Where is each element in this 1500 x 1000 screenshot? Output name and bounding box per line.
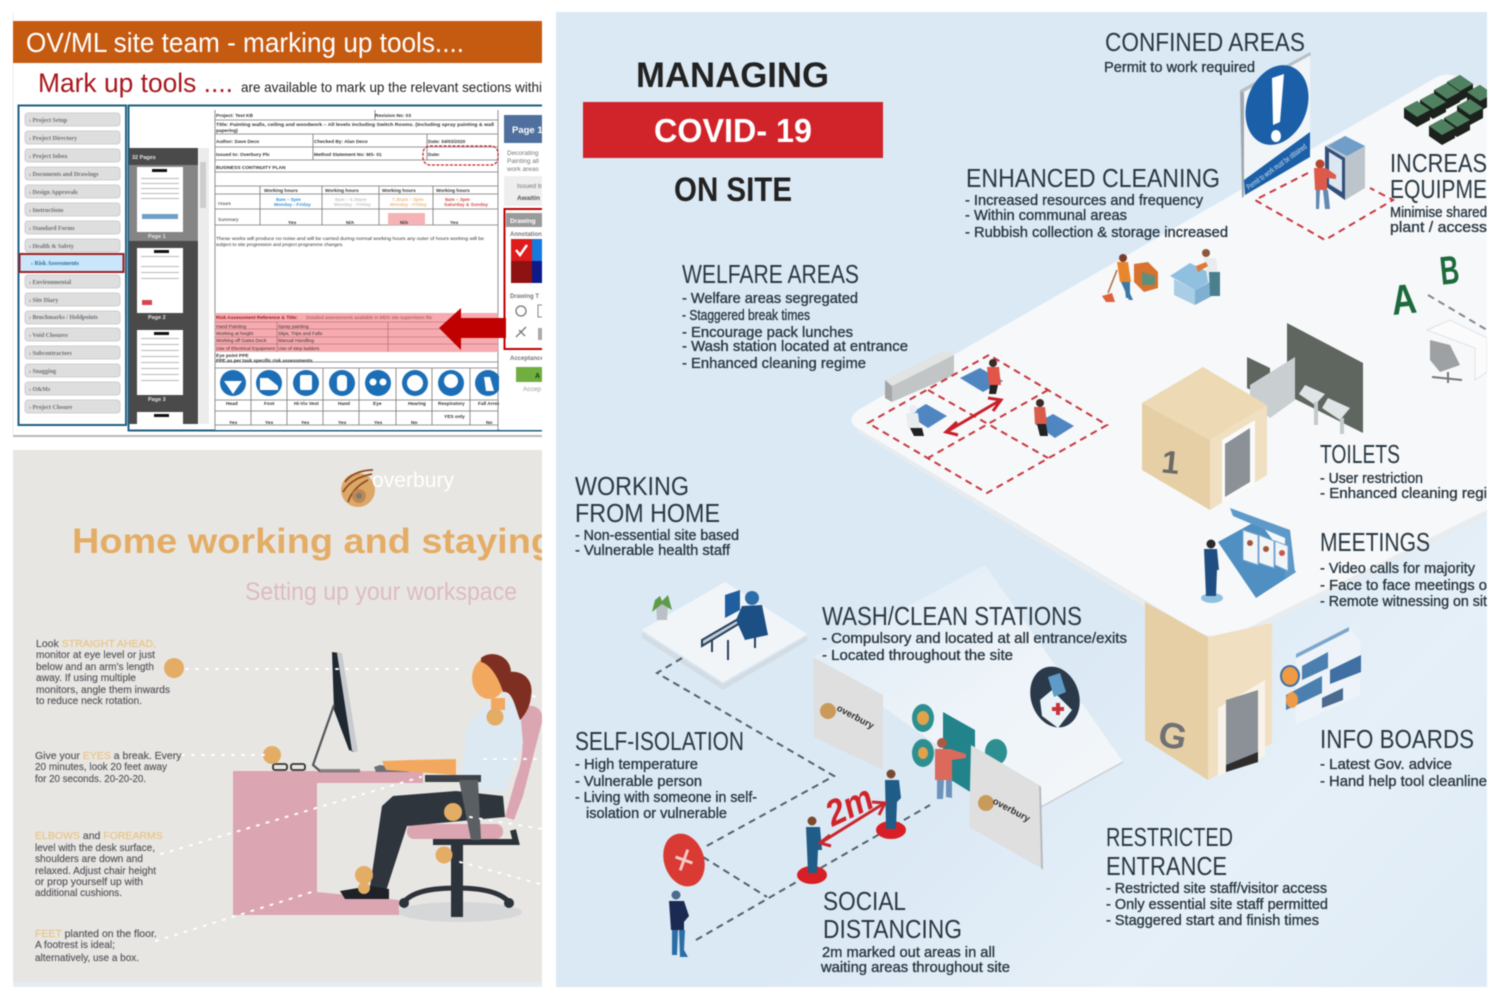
- text block: wash clean stations: [822, 603, 1127, 664]
- text block: welfare areas: WELFARE AREAS: [682, 261, 859, 289]
- sidebar menu: › Benchmarks / Holdpoints: [29, 315, 99, 321]
- document page: Working hours: [325, 188, 359, 194]
- sidebar menu: › Instructions: [29, 208, 64, 214]
- text block: welfare areas: - Wash station located at entrance: [682, 339, 908, 355]
- isolation dashed routes: [657, 658, 930, 940]
- text block: eyes: Give your EYES a break. Every: [35, 750, 182, 762]
- document page: Date: 04/03/2020: [428, 139, 466, 145]
- document page: N/A: [400, 220, 409, 226]
- highlighted date box: [423, 146, 498, 165]
- icon: floor marks A and B: B: [1438, 248, 1461, 294]
- document page: N/A: [346, 220, 355, 226]
- sidebar menu: › Project Setup: [29, 118, 68, 124]
- properties side panel: Acceptance: [510, 356, 544, 362]
- text block: toilets: - User restriction: [1320, 471, 1423, 487]
- text block: working from home: - Non-essential site based: [575, 528, 739, 544]
- title: COVID- 19: [654, 112, 812, 149]
- text block: meetings: - Face to face meetings o: [1320, 578, 1487, 594]
- properties side panel: Painting all: [507, 158, 539, 165]
- text block: confined areas: CONFINED AREAS: [1105, 29, 1305, 57]
- document page: Hi-Vis Vest: [294, 401, 319, 407]
- document page: Working hours: [264, 188, 298, 194]
- confined area dashed zone: [1255, 173, 1393, 240]
- text block: feet: alternatively, use a box.: [35, 952, 139, 964]
- text block: elbows: relaxed. Adjust chair height: [35, 865, 156, 877]
- sidebar menu: › Project Closure: [29, 405, 73, 411]
- sidebar menu: › Health & Safety: [29, 244, 74, 250]
- document page: 9am – 3pm: [445, 197, 470, 203]
- document page: Eye: [373, 401, 382, 407]
- text block: feet: [35, 928, 157, 964]
- text block: toilets: - Enhanced cleaning regi: [1320, 486, 1487, 502]
- icon: office desk and chair: [1427, 295, 1487, 383]
- page thumbnails: Page 1: [148, 234, 166, 240]
- text block: meetings: - Remote witnessing on sit: [1320, 594, 1487, 610]
- document page: Date:: [428, 152, 440, 158]
- icon: cleaners: [1102, 249, 1220, 305]
- title: ON SITE: [674, 171, 792, 209]
- text block: straight ahead: below and an arm's length: [36, 661, 154, 673]
- desk: [233, 771, 423, 915]
- text block: elbows: or prop yourself up with: [35, 876, 143, 888]
- properties side panel: A: [535, 373, 540, 380]
- text block: social distancing: DISTANCING: [823, 916, 962, 944]
- document page: No: [486, 420, 492, 426]
- text block: self isolation: isolation or vulnerable: [586, 806, 727, 822]
- document page: Issued to: Overbury Plc: [216, 152, 270, 158]
- document page: 7.30am – 5pm: [392, 197, 423, 203]
- text block: elbows: [35, 830, 163, 899]
- icon: worker at cabinet: [1314, 136, 1365, 209]
- slide title bar: [13, 21, 542, 63]
- text block: increased equipment: [1390, 150, 1487, 236]
- properties side panel: Page 1: [512, 125, 543, 136]
- icon: overbury logo: overbury: [372, 469, 455, 492]
- title: [583, 56, 883, 209]
- document page: Eye point PPE: [216, 353, 249, 359]
- properties side panel: work areas: [506, 166, 540, 173]
- text block: elbows: level with the desk surface,: [35, 842, 155, 854]
- callout markers: [164, 658, 504, 894]
- chair: [399, 706, 542, 917]
- document page: [215, 109, 502, 430]
- icon: overbury logo: [341, 469, 455, 507]
- icon: ground core box with door: [1145, 602, 1272, 780]
- text block: increased equipment: Minimise shared: [1390, 205, 1487, 221]
- text block: eyes: [35, 750, 182, 785]
- document page: Respiratory: [438, 401, 465, 407]
- text block: info boards: [1320, 726, 1487, 790]
- document page: These works will produce no noise and will be carried during normal working hours any outer of hours working will be: [216, 236, 484, 242]
- document page: Monday - Friday: [334, 202, 371, 208]
- icon: worker at door: [935, 738, 966, 799]
- text block: restricted entrance: ENTRANCE: [1106, 853, 1227, 881]
- properties side panel: Accep: [523, 386, 541, 393]
- icon: floor marks A and B: [1389, 248, 1461, 324]
- sidebar menu: › Design Approvals: [29, 190, 78, 196]
- icon: info boards: [1281, 627, 1361, 725]
- arrow: two metres apart: [820, 802, 885, 846]
- text block: working from home: FROM HOME: [575, 500, 720, 528]
- text block: restricted entrance: - Staggered start and finish times: [1106, 913, 1319, 929]
- icon: video meeting: [1201, 508, 1296, 603]
- document page: Yes: [338, 420, 347, 426]
- welfare dashed grid: [868, 355, 1107, 493]
- properties side panel: Annotation: [510, 232, 542, 238]
- document page: Manual Handling: [278, 338, 314, 344]
- document page: Summary: [218, 217, 239, 223]
- document page: Hand Painting: [216, 324, 246, 330]
- text block: restricted entrance: - Restricted site staff/visitor access: [1106, 881, 1327, 897]
- document page: subject to site progression and project programme changes.: [216, 242, 343, 248]
- PPE icons: [220, 370, 501, 396]
- icon: toilet partitions and sinks: [1247, 323, 1363, 434]
- sidebar menu: › Subcontractors: [29, 351, 72, 357]
- icon: welfare tables: [906, 359, 1074, 438]
- worker: [340, 654, 532, 899]
- icon: overbury hoarding panel right: overbury: [991, 796, 1032, 825]
- text block: enhanced cleaning: - Increased resources and frequency: [965, 193, 1204, 209]
- text block: working from home: WORKING: [575, 473, 689, 501]
- page thumbnails: Page 3: [148, 397, 166, 403]
- text block: toilets: [1320, 441, 1487, 502]
- text block: confined areas: Permit to work required: [1104, 60, 1255, 76]
- document page: Working hours: [436, 188, 470, 194]
- text block: increased equipment: INCREAS: [1390, 150, 1487, 178]
- icon: hand sanitiser badge: [1023, 660, 1087, 734]
- document page: Monday - Friday: [274, 202, 311, 208]
- slide subtitle: [39, 72, 542, 98]
- properties side panel: Awaitin: [517, 195, 540, 202]
- subheading: Setting up your workspace: [245, 578, 517, 606]
- document page: Foot: [264, 401, 275, 407]
- text block: restricted entrance: RESTRICTED: [1106, 824, 1233, 852]
- document page: Hours: [218, 201, 231, 207]
- document page: Checked By: Alan Deco: [314, 139, 368, 145]
- sidebar menu: [18, 106, 126, 425]
- title: MANAGING: [636, 56, 829, 95]
- text block: meetings: - Video calls for majority: [1320, 561, 1476, 577]
- text block: elbows: ELBOWS and FOREARMS: [35, 830, 163, 842]
- text block: info boards: - Hand help tool cleanline: [1320, 774, 1487, 790]
- document page: Yes: [374, 420, 383, 426]
- text block: wash clean stations: - Located throughout the site: [822, 648, 1013, 664]
- monitor: [313, 652, 360, 772]
- panel: marking up tools slide: [12, 12, 550, 438]
- icon: kitchen counter: [885, 350, 954, 402]
- text block: welfare areas: - Enhanced cleaning regime: [682, 356, 866, 372]
- icon: upper core box with door: [1142, 367, 1267, 510]
- sidebar menu: › Standard Forms: [29, 226, 75, 232]
- document page: Working at height: [216, 331, 254, 337]
- text block: welfare areas: [682, 261, 908, 372]
- document page: Hand: [338, 401, 350, 407]
- text block: feet: A footrest is ideal;: [35, 939, 115, 951]
- text block: increased equipment: plant / access: [1390, 220, 1487, 236]
- icon: home desk platform: [642, 582, 807, 690]
- icon: overbury hoarding panel left: overbury: [835, 703, 876, 732]
- document page: Spray painting: [278, 324, 309, 330]
- text block: social distancing: waiting areas throughout site: [820, 960, 1010, 976]
- ground floor platform: [813, 565, 1123, 807]
- text block: wash clean stations: WASH/CLEAN STATIONS: [822, 603, 1082, 631]
- page thumbnails: 32 Pages: [132, 155, 156, 161]
- text block: toilets: TOILETS: [1320, 441, 1400, 469]
- text block: straight ahead: monitors, angle them inwards: [36, 684, 170, 696]
- document page: Title: Painting walls, ceiling and woodwork – All levels including Switch Rooms. (Including spray painting & wall: [216, 122, 494, 128]
- text block: self isolation: - Vulnerable person: [575, 774, 702, 790]
- text block: eyes: for 20 seconds. 20-20-20.: [35, 773, 146, 785]
- document page: Slips, Trips and Falls: [278, 331, 323, 337]
- icon: ground core box with door: G: [1155, 713, 1191, 759]
- text block: self isolation: SELF-ISOLATION: [575, 728, 744, 756]
- document page: papering): [216, 128, 238, 134]
- document page: Head: [226, 401, 238, 407]
- document page: Saturday & Sunday: [444, 202, 488, 208]
- document page: PPE as per task specific risk assessments: [216, 358, 313, 364]
- sidebar menu: › O&Ms: [29, 387, 51, 393]
- sidebar menu: › Void Closures: [29, 333, 69, 339]
- two metre label: 2m: [818, 777, 879, 834]
- sidebar menu: › Risk Assessments: [31, 261, 80, 267]
- text block: elbows: shoulders are down and: [35, 853, 143, 865]
- document page: Method Statement No: MS- 01: [314, 152, 382, 158]
- document page: Hearing: [408, 401, 426, 407]
- icon: upper core box with door: 1: [1160, 443, 1181, 481]
- sidebar menu: › Project Directory: [29, 136, 77, 142]
- icon: overbury hoarding panel left: [813, 657, 883, 770]
- panel: managing covid-19 on site: [556, 12, 1493, 987]
- text block: elbows: additional cushions.: [35, 887, 122, 899]
- text block: straight ahead: [36, 638, 170, 707]
- text block: welfare areas: - Staggered break times: [682, 308, 810, 324]
- properties side panel: [498, 114, 543, 431]
- arrow: two metre separation: [946, 398, 1001, 435]
- document page: Use of Electrical Equipment: [216, 346, 276, 352]
- text block: restricted entrance: - Only essential site staff permitted: [1106, 897, 1328, 913]
- text block: welfare areas: - Welfare areas segregated: [682, 291, 858, 307]
- sidebar menu: › Documents and Drawings: [29, 172, 99, 178]
- icon: mandatory permit sign: [1240, 52, 1312, 198]
- sidebar menu: › Snagging: [29, 369, 56, 375]
- glasses: [273, 764, 305, 770]
- icon: equipment cluster: [1404, 75, 1493, 145]
- text block: working from home: [575, 473, 739, 559]
- page thumbnails: Page 2: [148, 315, 166, 321]
- text block: meetings: [1320, 529, 1487, 610]
- text block: enhanced cleaning: - Within communal areas: [965, 208, 1127, 224]
- text block: social distancing: 2m marked out areas in all: [822, 945, 995, 961]
- page thumbnails: [129, 148, 209, 426]
- document page: 8am – 5pm: [276, 197, 301, 203]
- keyboard: [374, 765, 409, 772]
- text block: enhanced cleaning: ENHANCED CLEANING: [966, 165, 1220, 193]
- text block: eyes: 20 minutes, look 20 feet away: [35, 761, 168, 773]
- document page: Use of step ladders: [278, 346, 320, 352]
- slide subtitle: are available to mark up the relevant sections withi: [241, 79, 542, 95]
- document page: Project: Test KB: [216, 113, 253, 119]
- text block: straight ahead: Look STRAIGHT AHEAD,: [36, 638, 156, 650]
- properties side panel: Issued b: [517, 183, 542, 190]
- text block: self isolation: - Living with someone in self-: [575, 790, 757, 806]
- panel: home working slide: [13, 450, 554, 987]
- document page: Yes: [288, 220, 297, 226]
- document page: Revision No: 03: [375, 113, 411, 119]
- document page: 8am – 5.30pm: [335, 197, 366, 203]
- text block: social distancing: [820, 888, 1010, 976]
- document page: Risk Assessment Reference & Title:: [216, 315, 298, 321]
- text block: welfare areas: - Encourage pack lunches: [682, 325, 853, 341]
- document page: Fall Arrest: [478, 401, 502, 407]
- text block: self isolation: - High temperature: [575, 757, 698, 773]
- document page: BUSINESS CONTINUITY PLAN: [216, 165, 286, 171]
- slide title bar: OV/ML site team - marking up tools....: [26, 27, 464, 58]
- text block: straight ahead: to reduce neck rotation.: [36, 695, 142, 707]
- text block: self isolation: [575, 728, 757, 822]
- main viewer frame: [128, 106, 548, 430]
- text block: meetings: MEETINGS: [1320, 529, 1430, 557]
- text block: info boards: INFO BOARDS: [1320, 726, 1474, 754]
- heading: Home working and staying: [72, 522, 554, 561]
- arrow: red pointer to risk table: [439, 308, 506, 350]
- document page: Author: Dave Deco: [216, 139, 259, 145]
- text block: restricted entrance: [1106, 824, 1328, 929]
- document page: Detailed assessments available in MDS site supervision file: [306, 315, 432, 321]
- text block: feet: FEET planted on the floor.: [35, 928, 157, 940]
- text block: enhanced cleaning: [965, 165, 1228, 241]
- sidebar menu: › Project Inbox: [29, 154, 68, 160]
- sidebar menu: › Environmental: [29, 280, 71, 286]
- text block: wash clean stations: - Compulsory and located at all entrance/exits: [822, 631, 1127, 647]
- icon: floor marks A and B: A: [1389, 275, 1419, 324]
- document page: Monday - Friday: [390, 202, 427, 208]
- social distancing figures: [797, 770, 906, 884]
- icon: overbury hoarding panel right: [969, 745, 1043, 870]
- icon: mandatory permit sign: Permit to work must be obtained: [1245, 142, 1308, 192]
- left person on marker: [797, 816, 827, 884]
- properties side panel: Decorating: [507, 150, 539, 157]
- text block: social distancing: SOCIAL: [823, 888, 906, 916]
- document page: Working off Gates Deck: [216, 338, 267, 344]
- right person on marker: [876, 770, 906, 839]
- properties side panel: Drawing: [510, 218, 536, 225]
- text block: working from home: - Vulnerable health staff: [575, 543, 731, 559]
- document page: Yes: [265, 420, 274, 426]
- illustration: desk and seated worker: [156, 652, 542, 941]
- properties side panel: Drawing T: [510, 294, 539, 300]
- text block: info boards: - Latest Gov. advice: [1320, 757, 1452, 773]
- document page: Yes: [301, 420, 310, 426]
- text block: confined areas: [1104, 29, 1305, 76]
- sidebar menu: › Site Diary: [29, 298, 58, 304]
- text block: straight ahead: away. If using multiple: [36, 672, 136, 684]
- document page: No: [411, 420, 417, 426]
- document page: YES only: [444, 414, 465, 420]
- text block: straight ahead: monitor at eye level or just: [36, 649, 155, 661]
- document page: Yes: [229, 420, 238, 426]
- document page: Working hours: [382, 188, 416, 194]
- icon: isolating person: [669, 890, 689, 957]
- slide subtitle: Mark up tools ....: [38, 68, 233, 98]
- icon: red no-entry marker: [657, 828, 711, 892]
- text block: enhanced cleaning: - Rubbish collection & storage increased: [965, 225, 1228, 241]
- icon: hygiene posters and door: [912, 704, 1007, 795]
- upper floor plate: [851, 74, 1487, 637]
- document page: Yes: [450, 220, 459, 226]
